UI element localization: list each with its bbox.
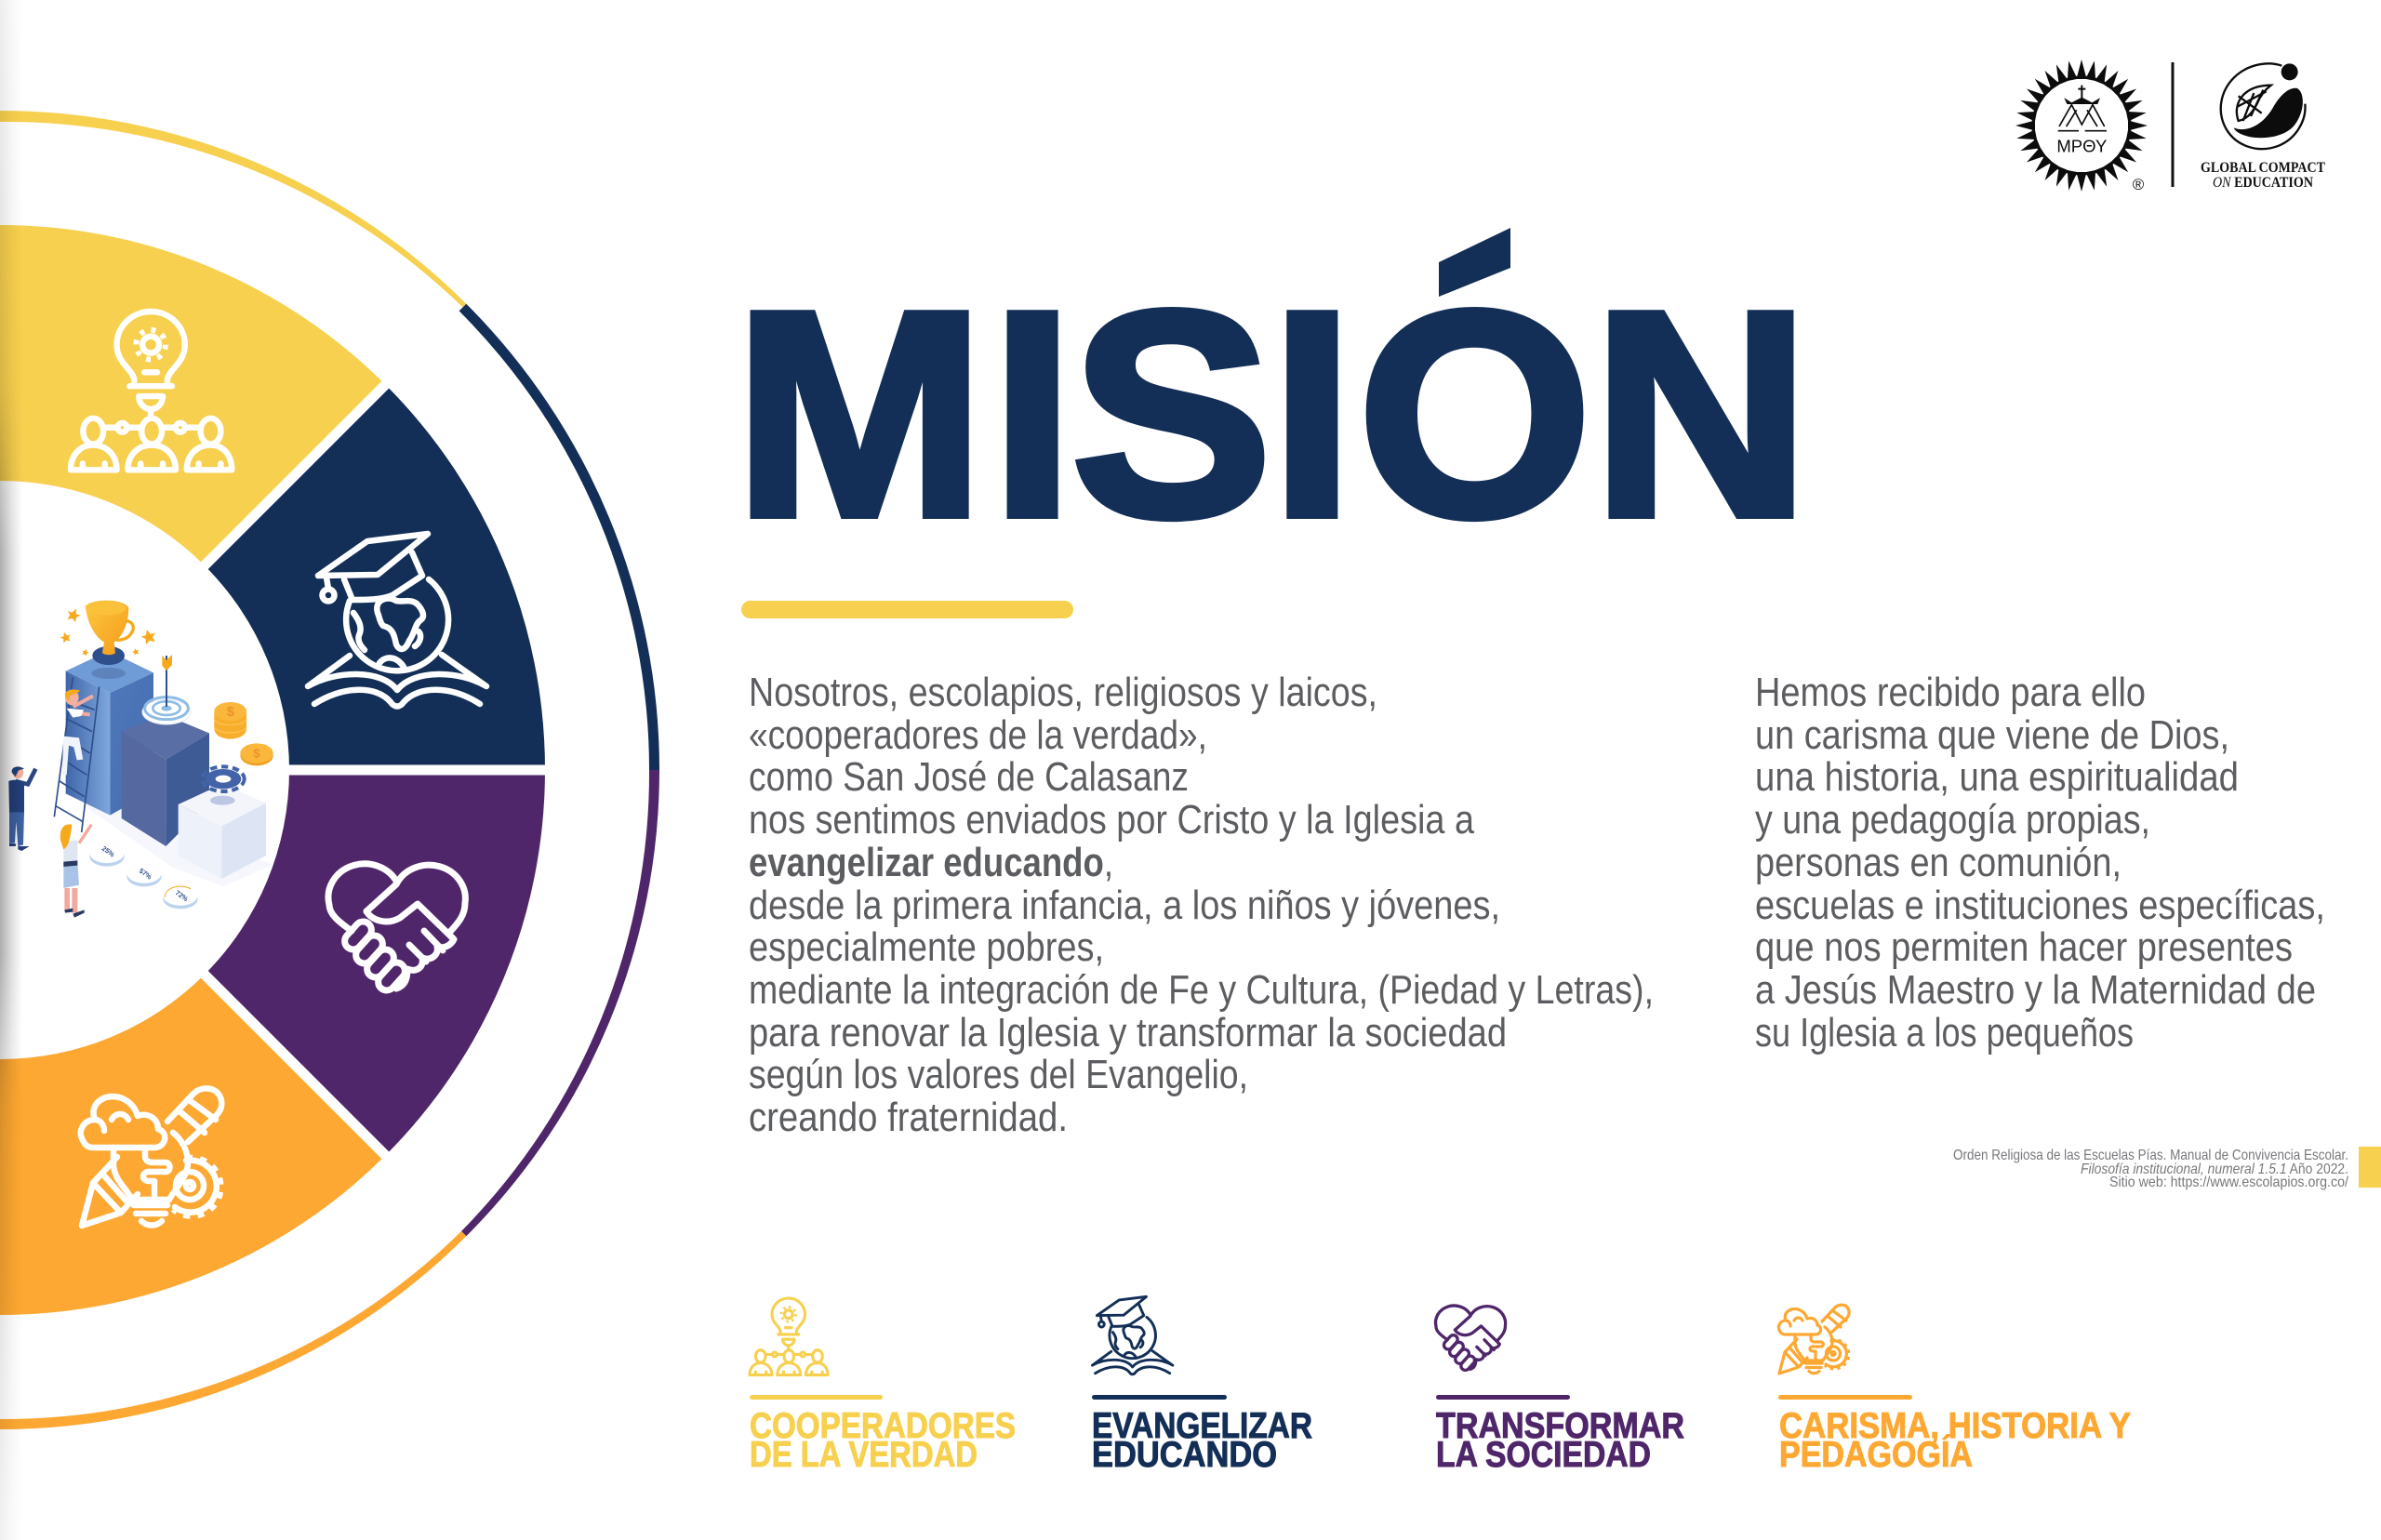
illustration: isometric columns xyxy=(8,601,273,918)
trophy xyxy=(86,601,133,665)
page fold shadow xyxy=(0,0,20,1540)
outer ring xyxy=(0,111,659,1429)
ring arc: yellow xyxy=(0,111,466,307)
text block: mission right: que nos permiten hacer presentes xyxy=(1755,924,2293,970)
logo: Global Compact on Education xyxy=(2201,63,2325,191)
text block: mission left: Nosotros, escolapios, religiosos y laicos, xyxy=(749,670,1377,715)
citation: Sitio web: https://www.escolapios.org.co/ xyxy=(2109,1175,2348,1190)
ladder xyxy=(54,677,100,832)
icon: bulb, pencil and gear xyxy=(81,1088,221,1226)
stars xyxy=(60,606,157,657)
coins xyxy=(214,702,273,765)
legend rule xyxy=(1436,1395,1570,1400)
text block: mission left: creando fraternidad. xyxy=(749,1095,1068,1140)
legend: transformar xyxy=(1435,1306,1684,1475)
title: MISIÓN xyxy=(734,250,1810,578)
legend label: DE LA VERDAD xyxy=(750,1435,978,1475)
middle column xyxy=(122,714,209,846)
legend label xyxy=(1779,1406,2131,1475)
climber xyxy=(62,689,93,775)
legend: carisma xyxy=(1778,1305,2131,1475)
text block: mission left: especialmente pobres, xyxy=(749,924,1104,970)
legend label xyxy=(1436,1406,1684,1475)
tall column xyxy=(66,651,153,816)
logo divider xyxy=(2171,62,2175,187)
text block: mission left: nos sentimos enviados por Cristo y la Iglesia a xyxy=(749,797,1474,843)
text block: mission right: personas en comunión, xyxy=(1755,840,2122,885)
legend icon xyxy=(1435,1306,1506,1372)
legend label: PEDAGOGÍA xyxy=(1779,1434,1973,1475)
legend label: EDUCANDO xyxy=(1092,1435,1277,1475)
text block: mission right: Hemos recibido para ello xyxy=(1755,670,2146,715)
logo: Global Compact on Education: GLOBAL COMPACT xyxy=(2201,160,2325,176)
edge tab xyxy=(2359,1147,2381,1188)
logo: Escuelas Pías xyxy=(2015,60,2148,193)
ring arc: orange xyxy=(0,1231,466,1429)
legend rule xyxy=(1778,1395,1912,1400)
legend label xyxy=(1092,1406,1312,1475)
percent discs: 57% xyxy=(138,867,153,882)
sector: navy xyxy=(205,385,545,770)
logo: Escuelas Pías: ® xyxy=(2133,176,2145,193)
legend label: COOPERADORES xyxy=(750,1406,1016,1446)
text block: mission left: «cooperadores de la verdad», xyxy=(749,712,1207,758)
gear xyxy=(202,766,245,791)
text block: mission right xyxy=(1755,670,2325,1055)
sector: yellow xyxy=(0,225,385,565)
text block: mission left: mediante la integración de Fe y Cultura, (Piedad y Letras), xyxy=(749,967,1654,1013)
text block: mission right: un carisma que viene de Dios, xyxy=(1755,712,2229,758)
text block: mission right: y una pedagogía propias, xyxy=(1755,797,2150,843)
legend label: TRANSFORMAR xyxy=(1436,1406,1684,1446)
man xyxy=(8,766,35,851)
percent discs xyxy=(89,843,198,909)
percent discs: 25% xyxy=(100,844,116,859)
text block: mission right: su Iglesia a los pequeños xyxy=(1755,1010,2134,1055)
citation xyxy=(1953,1148,2348,1190)
legend icon xyxy=(1092,1296,1173,1374)
legend label: LA SOCIEDAD xyxy=(1436,1435,1651,1475)
text block: mission left: evangelizar educando, xyxy=(749,840,1113,885)
text block: mission left: según los valores del Evangelio, xyxy=(749,1052,1248,1097)
citation: Filosofía institucional, numeral 1.5.1 Año 2022. xyxy=(2081,1162,2348,1177)
sector: orange xyxy=(0,975,385,1315)
sector wheel xyxy=(0,225,558,1315)
woman xyxy=(60,824,91,918)
white cube xyxy=(179,784,266,879)
legend: evangelizar xyxy=(1092,1296,1312,1475)
legend label xyxy=(750,1406,1016,1475)
coins: $ xyxy=(227,705,234,720)
text block: mission left: para renovar la Iglesia y transformar la sociedad xyxy=(749,1010,1507,1055)
legend label: EVANGELIZAR xyxy=(1092,1406,1312,1446)
icon: heart handshake xyxy=(328,864,465,994)
title underline xyxy=(741,601,1073,618)
text block: mission left xyxy=(749,670,1654,1140)
legend icon xyxy=(750,1298,828,1375)
percent discs: 72% xyxy=(174,888,190,903)
logo: Global Compact on Education: ON EDUCATION xyxy=(2213,175,2313,191)
text block: mission left: desde la primera infancia, a los niños y jóvenes, xyxy=(749,883,1500,928)
text block: mission right: una historia, una espiritualidad xyxy=(1755,754,2239,800)
legend rule xyxy=(750,1395,883,1400)
legend label: CARISMA, HISTORIA Y xyxy=(1779,1406,2131,1446)
sector: purple xyxy=(205,770,545,1155)
legend icon xyxy=(1778,1305,1849,1374)
icon: graduation globe and book xyxy=(308,534,486,707)
legend: cooperadores xyxy=(750,1298,1016,1475)
text block: mission left: como San José de Calasanz xyxy=(749,754,1189,800)
legend rule xyxy=(1092,1395,1227,1400)
coins: $ xyxy=(253,747,260,761)
ring arc: navy xyxy=(459,304,659,770)
logo: Escuelas Pías: ΜΡΘΥ xyxy=(2056,136,2108,155)
icon: bulb with people xyxy=(71,312,232,470)
ring arc: purple xyxy=(461,770,659,1236)
target with arrow xyxy=(142,655,191,724)
